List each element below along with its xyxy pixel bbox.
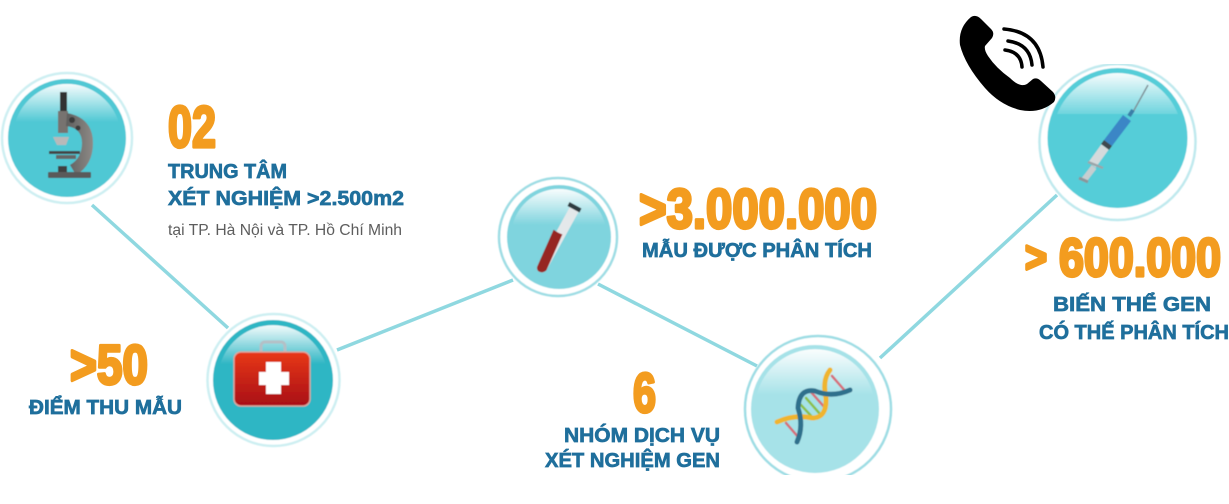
label: samples analysed: MẪU ĐƯỢC PHÂN TÍCH [642,238,872,262]
label: gene variants [1039,293,1229,344]
stat: gene test groups [545,361,720,472]
number: 6: 6 [633,361,656,424]
label: collection points: ĐIỂM THU MẪU [29,396,182,419]
icon: DNA helix [777,370,850,442]
icon: phone [960,16,1055,111]
node: test tube [499,178,617,296]
caption: locations: tại TP. Hà Nội và TP. Hồ Chí Minh [168,222,402,239]
icon: microscope [48,92,93,178]
stat: collection points [29,333,182,419]
label: laboratories: TRUNG TÂM [168,159,287,183]
connector lines [92,195,1057,366]
label: laboratories [168,159,404,210]
stat: laboratories [168,95,404,239]
label: gene variants: BIẾN THỂ GEN [1053,293,1211,316]
number: 02: 02 [168,95,216,160]
node: medical kit [208,314,340,446]
label: gene test groups [545,423,720,472]
node: syringe [1040,64,1196,220]
icon: test tube [537,202,582,272]
icon: medical kit [234,342,310,406]
node: DNA [745,336,891,482]
label: laboratories: XÉT NGHIỆM >2.500m2 [168,186,404,210]
number: >50: >50 [70,333,148,396]
label: gene variants: CÓ THẾ PHÂN TÍCH [1039,320,1229,344]
number: >3.000.000: >3.000.000 [639,177,877,240]
number: >600.000: > [1025,233,1047,282]
stat: gene variants [1025,228,1229,344]
label: gene test groups: XÉT NGHIỆM GEN [545,448,720,472]
icon: syringe [1079,85,1148,182]
stat: samples analysed [639,177,877,262]
node: microscope [2,73,132,203]
label: gene test groups: NHÓM DỊCH VỤ [564,423,720,447]
